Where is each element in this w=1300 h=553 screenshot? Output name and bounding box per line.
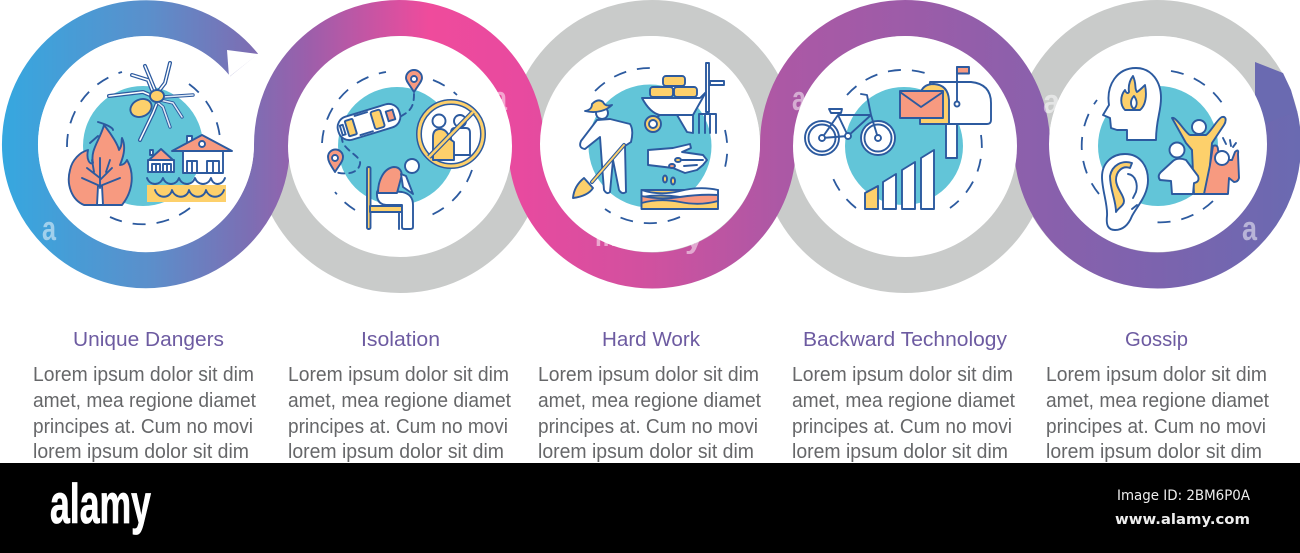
step 2 text: Isolation: Isolation xyxy=(361,329,440,351)
watermark letters: a xyxy=(1043,83,1061,121)
icon: no socialising sign xyxy=(419,102,483,166)
icon: pitchfork xyxy=(699,63,724,133)
grey ring segments xyxy=(273,18,1283,275)
watermark fragments on the ribbon: m xyxy=(595,220,617,253)
step 4 text: Backward Technology: lorem ipsum dolor sit dim xyxy=(792,441,1008,463)
icon: farmer with shovel xyxy=(573,100,632,198)
watermark letters: a xyxy=(42,210,57,248)
step 5 text: Gossip xyxy=(1046,329,1269,463)
step 5 text: Gossip: Gossip xyxy=(1125,329,1188,351)
black footer band with stock-photo credit xyxy=(0,463,1300,553)
icon: route pins xyxy=(328,70,422,173)
gradient ribbon connecting all steps xyxy=(20,18,1297,271)
step 1 text: Unique Dangers: Unique Dangers xyxy=(73,329,224,351)
icon: bicycle xyxy=(805,94,895,155)
alamy logo: alamy xyxy=(50,472,151,535)
step 1 text: Unique Dangers: lorem ipsum dolor sit dim xyxy=(33,441,249,463)
icon: wildfire xyxy=(69,122,132,205)
icon: flooded houses xyxy=(147,135,232,202)
icon group: isolation xyxy=(322,70,483,229)
step 4 text: Backward Technology xyxy=(792,329,1015,463)
watermark letters: a xyxy=(792,80,807,118)
icon group: gossip xyxy=(1082,68,1239,230)
step 5 text: Gossip: Lorem ipsum dolor sit dim xyxy=(1046,364,1267,386)
step 2 text: Isolation xyxy=(288,329,511,463)
icon: three gossiping people xyxy=(1159,117,1239,194)
step 3 text: Hard Work: lorem ipsum dolor sit dim xyxy=(538,441,754,463)
watermark letters: a xyxy=(1242,210,1258,248)
watermark fragments on the ribbon xyxy=(595,220,703,255)
step 1 text: Unique Dangers xyxy=(33,329,256,463)
step 4 text: Backward Technology: principes at. Cum no movi xyxy=(792,416,1012,438)
icon: spider xyxy=(109,63,193,140)
icon: head with fire xyxy=(1103,68,1161,140)
step 2 text: Isolation: amet, mea regione diamet xyxy=(288,390,511,412)
step 4 text: Backward Technology: amet, mea regione diamet xyxy=(792,390,1015,412)
watermark letters: a xyxy=(493,80,508,118)
icon group: hard work xyxy=(573,63,727,223)
icon: soil layers xyxy=(642,188,718,209)
step 3 text: Hard Work: amet, mea regione diamet xyxy=(538,390,761,412)
watermark letters xyxy=(42,80,1258,248)
step 1 text: Unique Dangers: principes at. Cum no movi xyxy=(33,416,253,438)
icon: car xyxy=(335,101,403,143)
step 1 text: Unique Dangers: amet, mea regione diamet xyxy=(33,390,256,412)
icon: rising bars xyxy=(865,150,934,209)
icon: hand sowing seeds xyxy=(648,144,707,184)
step 3 text: Hard Work: principes at. Cum no movi xyxy=(538,416,758,438)
step 4 text: Backward Technology: Backward Technology xyxy=(803,329,1007,351)
icon: ear xyxy=(1102,154,1148,230)
icon: wheelbarrow with bricks xyxy=(642,76,706,133)
white inner discs xyxy=(38,36,1267,256)
step 2 text: Isolation: lorem ipsum dolor sit dim xyxy=(288,441,504,463)
step 2 text: Isolation: Lorem ipsum dolor sit dim xyxy=(288,364,509,386)
icon: person sitting alone xyxy=(367,159,419,229)
step 5 text: Gossip: lorem ipsum dolor sit dim xyxy=(1046,441,1262,463)
icon: mailbox and envelope xyxy=(900,67,991,158)
step 1 text: Unique Dangers: Lorem ipsum dolor sit dim xyxy=(33,364,254,386)
website: www.alamy.com xyxy=(1115,512,1250,528)
step 3 text: Hard Work xyxy=(538,329,761,463)
icon group: backward technology xyxy=(805,67,991,209)
icon group: unique dangers xyxy=(67,63,232,224)
image id: Image ID: 2BM6P0A xyxy=(1117,488,1250,504)
step 5 text: Gossip: amet, mea regione diamet xyxy=(1046,390,1269,412)
step 2 text: Isolation: principes at. Cum no movi xyxy=(288,416,508,438)
step 3 text: Hard Work: Hard Work xyxy=(602,329,701,351)
step 3 text: Hard Work: Lorem ipsum dolor sit dim xyxy=(538,364,759,386)
watermark fragments on the ribbon: y xyxy=(685,222,703,255)
step 4 text: Backward Technology: Lorem ipsum dolor sit dim xyxy=(792,364,1013,386)
step 5 text: Gossip: principes at. Cum no movi xyxy=(1046,416,1266,438)
